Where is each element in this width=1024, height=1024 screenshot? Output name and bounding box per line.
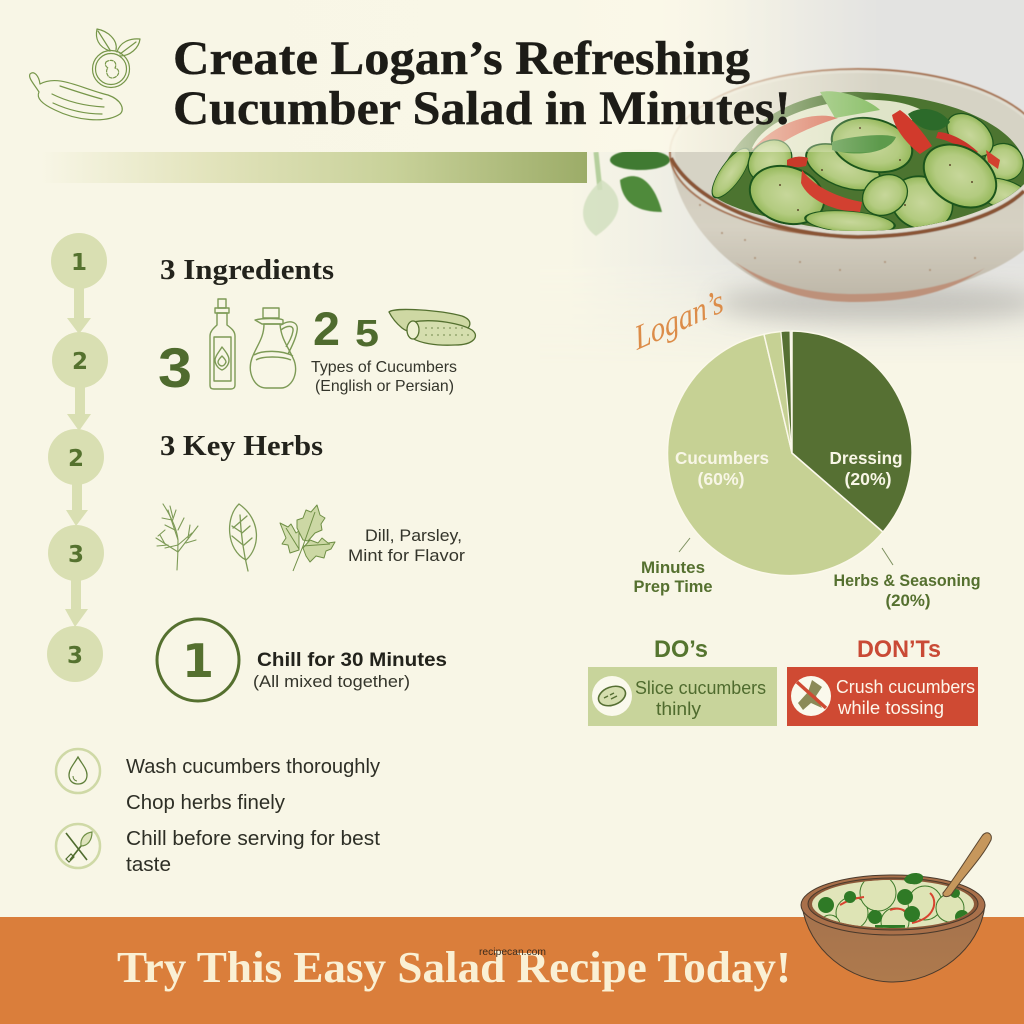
slice: dressing xyxy=(792,331,912,532)
bowl salad xyxy=(812,880,974,928)
watermark: recipecan.com xyxy=(479,947,546,958)
tips list xyxy=(126,755,381,876)
photo: cucumber salad xyxy=(705,91,1024,239)
timeline of numbered steps: 1 xyxy=(71,250,87,276)
timeline of numbered steps: 2 xyxy=(68,446,84,472)
icon: cucumber slice xyxy=(592,676,632,716)
chill badge: 1 xyxy=(182,634,214,688)
slice: light sliver xyxy=(764,332,792,453)
title: Cucumber Salad in Minutes! xyxy=(173,82,791,135)
heading: 3 Key Herbs: 3 Key Herbs xyxy=(160,431,323,462)
script label: Logan's: Logan’s xyxy=(631,282,726,358)
tips list: Wash cucumbers thoroughly xyxy=(126,755,381,778)
callout: herbs and seasoning xyxy=(834,548,980,610)
ingredient numbers 2 and 5: 2 xyxy=(313,302,340,355)
gradient bar under title xyxy=(40,152,587,183)
icon: water drop xyxy=(56,749,100,793)
heading: DON'Ts: DON’Ts xyxy=(857,636,941,663)
icon: knife and herb xyxy=(56,824,100,868)
bowl garnish xyxy=(904,873,923,884)
panel: don'ts xyxy=(787,636,978,726)
chill text: Chill for 30 Minutes xyxy=(257,649,447,671)
chill badge xyxy=(157,619,239,701)
herbs caption: Dill, Parsley, xyxy=(365,526,462,545)
chill callout xyxy=(157,619,447,701)
cucumber types caption: Types of Cucumbers xyxy=(311,359,457,376)
pie labels: (20%) xyxy=(844,469,892,489)
slice: cucumbers xyxy=(668,334,883,576)
panel: do's xyxy=(588,636,777,726)
panel: do's: Slice cucumbers xyxy=(635,677,766,698)
icon: oil bottle xyxy=(210,299,235,389)
slice: dark sliver xyxy=(781,331,792,453)
title: Create Logan’s Refreshing xyxy=(173,32,750,85)
panel: don'ts: Crush cucumbers xyxy=(836,676,975,697)
ingredient numbers 2 and 5 xyxy=(313,302,379,355)
tips list: Chill before serving for best xyxy=(126,827,380,850)
photo: mint sprig xyxy=(583,152,662,236)
illustration: salad bowl with spoon xyxy=(801,833,991,982)
pie chart xyxy=(668,331,912,576)
heading: DO's: DO’s xyxy=(654,636,708,663)
cucumber types caption xyxy=(311,359,457,395)
title xyxy=(173,32,791,135)
callout: minutes prep time xyxy=(634,538,712,596)
pie labels xyxy=(675,448,902,489)
photo: salad bowl on a table xyxy=(582,0,1024,341)
pie labels: Cucumbers xyxy=(675,448,769,468)
photo: cucumber behind bowl xyxy=(610,150,670,170)
timeline of numbered steps: 2 xyxy=(72,349,88,375)
photo: ceramic bowl xyxy=(670,69,1024,302)
panel: do's: thinly xyxy=(656,698,702,719)
icon: dill xyxy=(156,504,198,570)
footer band xyxy=(0,917,1024,1024)
icon: vinegar jug xyxy=(250,308,297,388)
timeline of numbered steps xyxy=(47,233,108,682)
pie labels: (60%) xyxy=(698,469,744,489)
herbs caption: Mint for Flavor xyxy=(348,546,465,565)
icon: two cucumbers xyxy=(389,309,475,345)
timeline of numbered steps: 3 xyxy=(67,643,83,669)
footer call to action: Try This Easy Salad Recipe Today! xyxy=(117,943,791,992)
callout: minutes prep time: Minutes xyxy=(641,559,705,577)
panel: don'ts: while tossing xyxy=(837,697,944,718)
cucumber types caption: (English or Persian) xyxy=(315,378,454,395)
callout: herbs and seasoning: Herbs & Seasoning xyxy=(834,572,980,590)
icon: basil leaf xyxy=(230,504,256,571)
herbs caption xyxy=(348,526,465,565)
timeline of numbered steps: 3 xyxy=(68,542,84,568)
icon: parsley xyxy=(280,505,335,571)
title backdrop band xyxy=(0,0,880,152)
wooden spoon xyxy=(943,833,991,897)
heading: 3 Ingredients: 3 Ingredients xyxy=(160,255,334,286)
icon: crushed cucumber crossed out xyxy=(791,676,831,716)
ingredient number 3: 3 xyxy=(158,336,192,399)
tips list: Chop herbs finely xyxy=(126,791,286,814)
chill text xyxy=(253,649,447,691)
ingredient numbers 2 and 5: 5 xyxy=(355,313,379,355)
callout: minutes prep time: Prep Time xyxy=(634,578,712,596)
chill text: (All mixed together) xyxy=(253,672,410,691)
callout: herbs and seasoning: (20%) xyxy=(886,592,930,610)
pie labels: Dressing xyxy=(830,448,902,468)
icon: cucumber and slice with leaves xyxy=(30,29,140,120)
tips list: taste xyxy=(126,853,171,876)
